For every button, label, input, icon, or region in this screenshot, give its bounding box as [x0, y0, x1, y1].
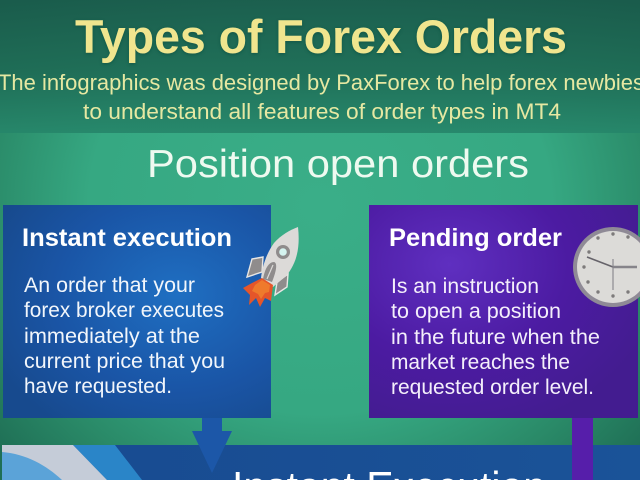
- heading: instant execution: Instant execution: [22, 224, 232, 252]
- text block: pending order description: requested order level.: [391, 375, 594, 399]
- panel: instant execution detail: [2, 445, 640, 480]
- text block: pending order description: Is an instruction: [391, 274, 539, 298]
- subtitle: The infographics was designed by PaxForex to help forex newbies: [0, 70, 640, 95]
- text block: pending order description: market reaches the: [391, 350, 570, 374]
- arrow: down from pending order: [572, 418, 593, 480]
- text block: instant execution description: An order that your: [24, 273, 195, 297]
- arrow: down from instant execution: [192, 418, 232, 473]
- text block: instant execution description: [24, 273, 225, 398]
- text block: instant execution description: forex broker executes: [24, 298, 224, 322]
- text block: pending order description: [391, 274, 600, 399]
- panel: pending order: [369, 205, 638, 418]
- subtitle: [0, 70, 640, 124]
- icon: clock: [573, 227, 640, 307]
- text block: pending order description: in the future when the: [391, 325, 600, 349]
- text block: instant execution description: immediately at the: [24, 324, 200, 348]
- section heading: position open orders: Position open orders: [147, 143, 529, 186]
- header band: [0, 0, 640, 133]
- decorative arcs: [73, 445, 142, 480]
- title: Types of Forex Orders: [75, 11, 567, 64]
- text block: instant execution description: current price that you: [24, 349, 225, 373]
- panel: instant execution: [3, 205, 271, 418]
- icon: rocket: [243, 227, 299, 307]
- text block: pending order description: to open a position: [391, 299, 561, 323]
- heading: pending order: Pending order: [389, 224, 562, 252]
- text block: instant execution description: have requested.: [24, 374, 172, 398]
- title: Types of Forex Orders: [75, 10, 567, 63]
- subtitle: to understand all features of order types in MT4: [83, 99, 561, 124]
